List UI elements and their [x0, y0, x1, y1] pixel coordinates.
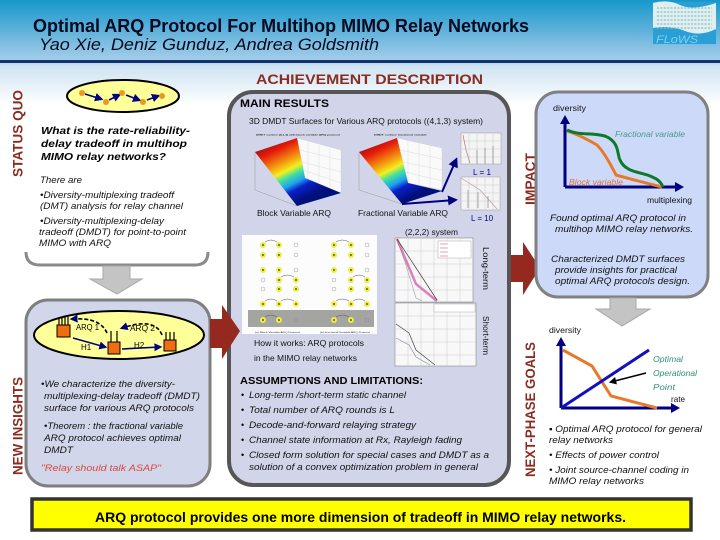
list: assumptions: Decode-and-forward relaying strategy [249, 420, 417, 431]
text block: impact statements: optimal ARQ protocols design. [555, 276, 690, 287]
chart: impact tradeoff curves: diversity [553, 103, 587, 113]
list: assumptions: Closed form solution for special cases and DMDT as a [249, 450, 489, 461]
diagram: ARQ relay ellipse [34, 311, 204, 359]
diagram: ARQ protocols [242, 235, 377, 334]
chart: operational point: diversity [549, 325, 582, 335]
chart: operational point: Point [653, 382, 676, 392]
chart: impact tradeoff curves: multiplexing [647, 195, 692, 205]
label: next-phase goals: NEXT-PHASE GOALS [522, 342, 538, 477]
arrow: impact to next-phase goals [596, 298, 650, 326]
heading: main results: MAIN RESULTS [240, 98, 329, 110]
chart: block variable ARQ surface [255, 134, 341, 206]
chart: operational point [549, 325, 698, 413]
diagram: ARQ protocols: (b) Fractional Variable ARQ Protocol [320, 331, 371, 334]
label: long-term: Long-term [481, 247, 491, 290]
diagram: ARQ protocols: (a) Block Variable ARQ Protocol [255, 331, 301, 334]
quote: "Relay should talk ASAP" [41, 463, 162, 474]
list: assumptions: Long-term /short-term static channel [249, 390, 407, 401]
text block: impact statements [550, 213, 693, 287]
diagram: ARQ relay ellipse: H1 [81, 343, 92, 352]
chart: impact tradeoff curves: Block variable [569, 177, 623, 187]
arrow: new insights to main results [210, 305, 240, 359]
caption: (2,2,2) system: (2,2,2) system [405, 227, 458, 237]
chart: short-term [395, 303, 476, 366]
list: assumptions: solution of a convex optimization problem in general [249, 462, 479, 473]
chart: impact tradeoff curves: Fractional variable [615, 129, 685, 139]
chart: fractional variable ARQ surface: DMDT surface fractional variable [374, 134, 427, 136]
text block: existing work: •Diversity-multiplexing-delay [40, 216, 165, 227]
text block: next-phase goals: relay networks [549, 435, 613, 446]
list: assumptions: Total number of ARQ rounds is L [249, 405, 395, 416]
heading: assumptions: ASSUMPTIONS AND LIMITATIONS: [240, 375, 423, 387]
text block: existing work: •Diversity-multiplexing tradeoff [40, 190, 175, 201]
label: status quo: STATUS QUO [10, 90, 26, 177]
label: L = 1: L = 1 [473, 167, 491, 177]
icon: multihop path ellipse [67, 80, 179, 112]
chart: operational point: Operational [653, 368, 698, 378]
text block: research question: What is the rate-reliability- [41, 125, 191, 137]
text block: next-phase goals: • Joint source-channel coding in [549, 465, 689, 476]
text block: next-phase goals [549, 424, 703, 487]
text block: impact statements: Found optimal ARQ protocol in [550, 213, 686, 224]
list: assumptions [241, 390, 489, 473]
chart: impact tradeoff curves [553, 103, 692, 205]
banner: conclusion: ARQ protocol provides one more dimension of tradeoff in MIMO relay networks. [95, 509, 626, 525]
text block: findings: •Theorem : the fractional variable [44, 421, 183, 432]
text block: existing work: MIMO with ARQ [39, 238, 112, 249]
text block: impact statements: Characterized DMDT surfaces [551, 254, 685, 265]
arrow: to L=1 chart [442, 160, 456, 192]
caption: block variable ARQ: Block Variable ARQ [257, 208, 331, 218]
text block: findings: •We characterize the diversity- [41, 379, 175, 390]
text block: impact statements: provide insights for practical [554, 265, 678, 276]
text block: existing work: tradeoff (DMDT) for point-to-point [39, 227, 186, 238]
bracket under status quo [26, 252, 208, 265]
label: short-term: Short-term [481, 316, 491, 355]
diagram: ARQ relay ellipse: ARQ 2 [130, 324, 156, 333]
diagram: ARQ relay ellipse: ARQ 1 [76, 323, 100, 332]
list: assumptions: Channel state information at Rx, Rayleigh fading [249, 435, 463, 446]
text block: impact statements: multihop MIMO relay networks. [555, 224, 693, 235]
arrow: main results to impact [511, 242, 540, 295]
text block: findings: surface for various ARQ protocols [44, 403, 194, 414]
heading: achievement description: ACHIEVEMENT DESCRIPTION [256, 71, 483, 87]
text block: existing work: There are [40, 175, 82, 186]
caption: how it works [254, 338, 364, 363]
text block: findings: ARQ protocol achieves optimal [43, 433, 182, 444]
list: assumptions: • [241, 405, 244, 415]
label: L = 10: L = 10 [471, 213, 493, 223]
arrow: to L=10 chart [402, 200, 455, 204]
caption: fractional variable ARQ: Fractional Variable ARQ [358, 208, 448, 218]
text block: findings: multiplexing-delay tradeoff (DMDT) [44, 391, 200, 402]
text block: next-phase goals: ▪ Optimal ARQ protocol for general [549, 424, 703, 435]
panel: impact [536, 92, 708, 297]
text block: research question: delay tradeoff in multihop [41, 138, 188, 150]
list: assumptions: • [241, 420, 244, 430]
caption: 3D surfaces: 3D DMDT Surfaces for Various ARQ protocols ((4,1,3) system) [249, 116, 483, 126]
diagram: ARQ relay ellipse: H2 [134, 341, 145, 350]
chart: operational point: rate [671, 394, 685, 404]
label: impact: IMPACT [522, 153, 538, 205]
text block: existing work: (DMT) analysis for relay channel [40, 201, 184, 212]
chart: L = 10 [461, 177, 500, 210]
chart: block variable ARQ surface: DMDT surface (4,1,3) with block variable ARQ protocol [256, 134, 341, 136]
logo: FLoWS: FLoWS [656, 34, 699, 46]
caption: how it works: in the MIMO relay networks [254, 353, 357, 363]
text block: findings [41, 379, 200, 456]
chart: operational point: Optimal [653, 354, 684, 364]
caption: how it works: How it works: ARQ protocols [254, 338, 364, 348]
text block: research question [41, 125, 191, 163]
logo: FLoWS [653, 1, 716, 46]
text block: next-phase goals: MIMO relay networks [549, 476, 644, 487]
list: assumptions: • [241, 450, 244, 460]
header background [0, 0, 720, 105]
chart: fractional variable ARQ surface [359, 134, 442, 204]
text block: findings: DMDT [44, 445, 74, 456]
title: Optimal ARQ Protocol For Multihop MIMO Relay Networks [33, 15, 529, 36]
chart: long-term [395, 238, 473, 302]
text block: next-phase goals: • Effects of power control [549, 450, 660, 461]
label: new insights: NEW INSIGHTS [10, 377, 26, 475]
panel: main results [229, 92, 509, 485]
panel: new insights [26, 300, 210, 486]
chart: L = 1 [461, 133, 501, 164]
text block: existing work [39, 175, 186, 249]
text block: research question: MIMO relay networks? [41, 151, 167, 163]
arrow: status quo to new insights [90, 266, 142, 294]
banner: conclusion [32, 499, 691, 530]
list: assumptions: • [241, 435, 244, 445]
authors: Yao Xie, Deniz Gunduz, Andrea Goldsmith [39, 35, 379, 54]
list: assumptions: • [241, 390, 244, 400]
header rule [0, 60, 720, 63]
